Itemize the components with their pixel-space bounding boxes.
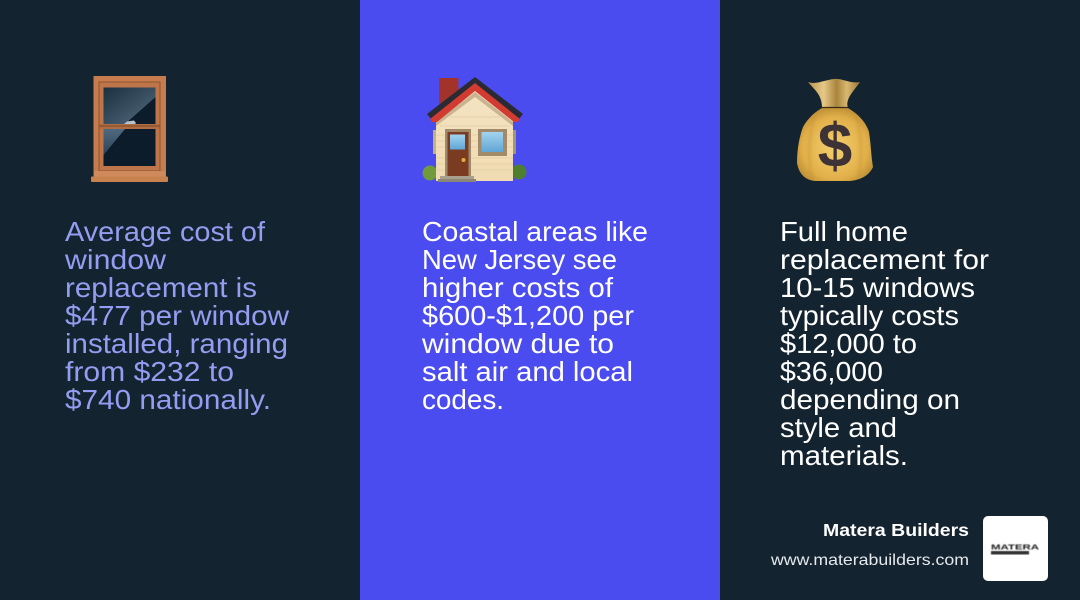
logo: MATERA xyxy=(991,542,1040,552)
text block: coastal costs xyxy=(421,216,648,415)
text block: coastal costs: codes. xyxy=(422,384,504,415)
icon: money bag xyxy=(797,79,873,181)
text block: average cost: $740 nationally. xyxy=(65,384,271,415)
logo xyxy=(983,516,1048,581)
text block: average cost: from $232 to xyxy=(65,356,234,387)
panel: background right xyxy=(720,0,1080,600)
text block: full home replacement: typically costs xyxy=(780,300,959,331)
panel: background left xyxy=(0,0,360,600)
text block: coastal costs: $600-$1,200 per xyxy=(422,300,634,331)
text block: coastal costs: salt air and local xyxy=(422,356,633,387)
panel: background center xyxy=(360,0,720,600)
text block: coastal costs: New Jersey see xyxy=(422,244,617,275)
text block: full home replacement: Full home xyxy=(780,216,908,247)
text block: average cost: $477 per window xyxy=(65,300,290,331)
text block: full home replacement: $12,000 to xyxy=(780,328,917,359)
text block: full home replacement: $36,000 xyxy=(780,356,883,387)
icon: house xyxy=(422,77,526,182)
text block: coastal costs: Coastal areas like xyxy=(422,216,648,247)
text block: coastal costs: window due to xyxy=(421,328,614,359)
text block: full home replacement: replacement for xyxy=(780,244,989,275)
text block: average cost: Average cost of xyxy=(65,216,265,247)
text block: full home replacement: 10-15 windows xyxy=(780,272,975,303)
text block: full home replacement: style and xyxy=(780,412,897,443)
text block: full home replacement xyxy=(780,216,989,471)
text block: average cost: installed, ranging xyxy=(65,328,288,359)
text block: average cost: replacement is xyxy=(65,272,257,303)
website url: www.materabuilders.com xyxy=(770,552,969,569)
text block: full home replacement: materials. xyxy=(780,440,908,471)
text block: full home replacement: depending on xyxy=(780,384,960,415)
text block: coastal costs: higher costs of xyxy=(422,272,613,303)
dollar sign glyph: $ xyxy=(818,112,852,181)
text block: average cost: window xyxy=(64,244,167,275)
text block: average cost xyxy=(64,216,290,415)
brand name: Matera Builders xyxy=(823,520,969,540)
icon: window xyxy=(91,76,168,182)
